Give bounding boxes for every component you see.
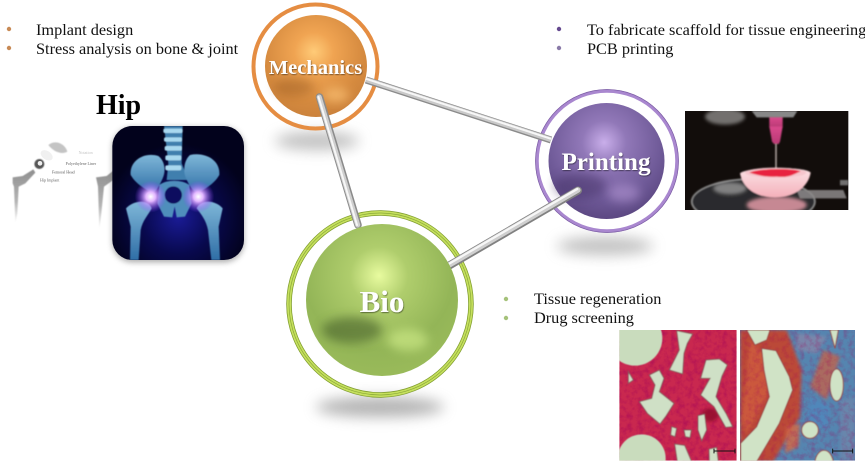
bio ring [289,213,471,395]
scale bar: red stain [714,449,735,453]
section: red stain [619,330,737,461]
node: mechanics [254,4,378,128]
text block: mechanics applications: Implant design [36,20,133,39]
text block: bio applications: Tissue regeneration [534,289,661,308]
printing ring [536,90,678,232]
image: histology stained tissue sections [619,330,855,461]
text block: mechanics applications [7,20,239,58]
mechanics ring [254,4,378,128]
mechanics sphere [265,15,367,117]
connector: mechanics to bio [318,97,358,225]
printing label: Printing [562,149,651,176]
illustration: hip implant exploded diagram: Polyethylene Liner [66,161,97,166]
mechanics label: Mechanics [269,57,362,79]
illustration: hip implant exploded diagram [13,142,113,230]
bio label: Bio [360,284,404,319]
connector: printing to bio [444,189,578,268]
image: 3D bioprinting photo [685,111,848,210]
printing sphere [548,103,664,219]
text block: printing applications: PCB printing [587,39,673,58]
node: printing [536,90,678,232]
text block: mechanics applications: Stress analysis on bone & joint [36,39,239,58]
connector: mechanics to printing [366,79,551,140]
section: blue and red stain [740,330,855,462]
text block: printing applications: To fabricate scaffold for tissue engineering [587,20,865,39]
scale bar: blue stain [833,449,853,453]
shadow: mechanics sphere [275,132,359,150]
illustration: hip implant exploded diagram: Hip Implant [40,178,60,183]
illustration: hip implant exploded diagram: Notation [79,150,93,155]
shadow: bio sphere [316,397,444,417]
bio sphere [306,224,458,376]
image: pelvis x-ray [112,126,244,262]
shadow: printing sphere [557,237,653,255]
text block: bio applications [504,289,661,327]
text block: printing applications [557,20,865,58]
node: bio [306,224,458,376]
illustration: hip implant exploded diagram: Femoral Head [52,169,75,174]
heading: Hip: Hip [96,90,141,121]
text block: bio applications: Drug screening [534,308,634,327]
